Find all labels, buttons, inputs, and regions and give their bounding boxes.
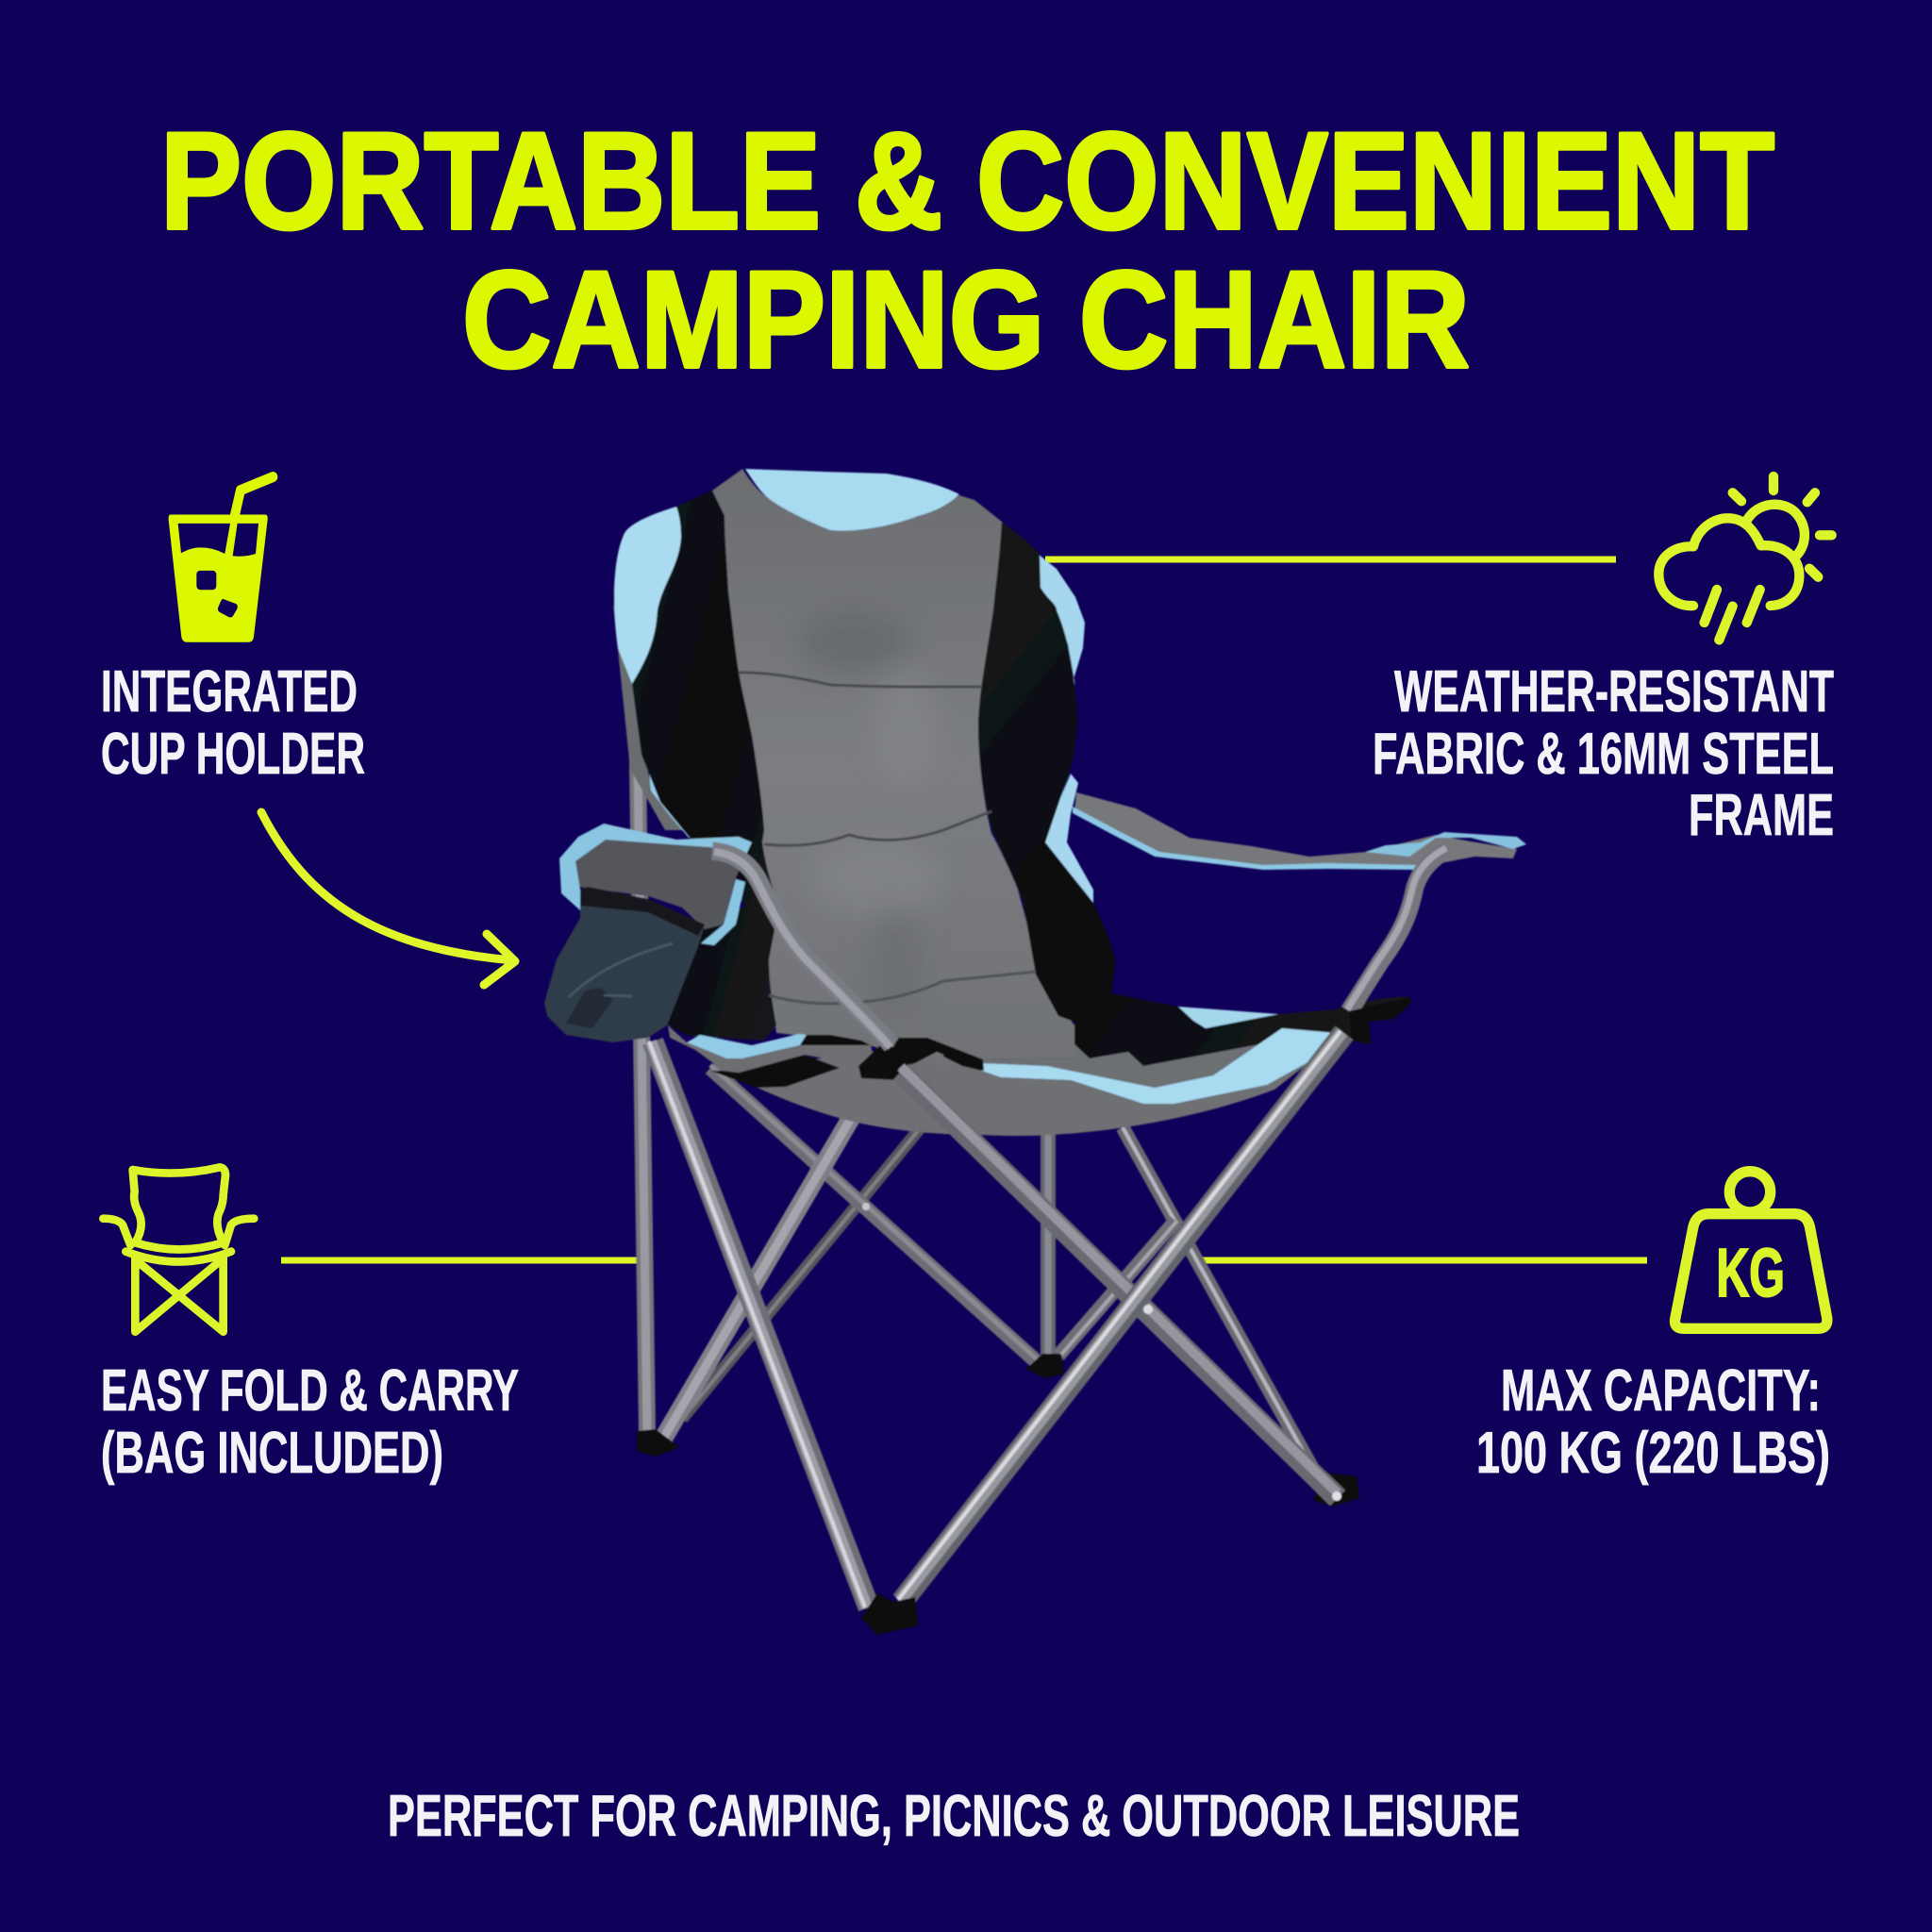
title [160, 104, 1774, 396]
seat black corner [943, 1047, 982, 1071]
text: integrated cup holder [101, 659, 365, 787]
seat grey inset [981, 1028, 1282, 1088]
rear legs and struts [637, 698, 1316, 1474]
front foot [861, 1593, 918, 1635]
right seat tab [1349, 997, 1411, 1044]
icon: kg weight [1675, 1172, 1827, 1328]
seat left blue piping [687, 1034, 807, 1058]
back black right panel and seat wing [978, 522, 1411, 1066]
icon: cup with straw [169, 477, 273, 642]
text: integrated cup holder: CUP HOLDER [101, 722, 365, 787]
chair photo illustration [544, 469, 1526, 1635]
seat underside bowl [726, 1047, 1313, 1136]
icon: folding chair [103, 1167, 254, 1332]
text: weather-resistant fabric: FRAME [1689, 783, 1834, 848]
icon: kg weight: KG [1716, 1236, 1785, 1311]
back quilting seams [739, 673, 1036, 1004]
text: max capacity [1476, 1358, 1830, 1486]
seat left mesh [710, 1055, 840, 1088]
feature: cup holder [101, 477, 365, 787]
back: left grey rim and blue panels [613, 507, 1093, 903]
back black left panel [632, 491, 776, 1041]
feature: weather resistant [1373, 476, 1834, 848]
seat small blue patch [1178, 1007, 1278, 1028]
back centre grey panel [712, 469, 1077, 1066]
rear feet [637, 1354, 1359, 1507]
title: CAMPING CHAIR [462, 242, 1470, 396]
text: integrated cup holder: INTEGRATED [101, 659, 358, 724]
feature: easy fold [101, 1167, 519, 1486]
back top blue panel [745, 469, 959, 531]
arrow to cup holder [261, 812, 515, 985]
cup holder arm pad [559, 824, 752, 945]
text: easy fold and carry: (BAG INCLUDED) [101, 1421, 443, 1486]
text: easy fold and carry [101, 1358, 519, 1486]
icon: cloud, sun and rain [1658, 476, 1832, 640]
seat left grey rim [668, 1025, 873, 1073]
left arm tube [712, 851, 891, 1047]
text: easy fold and carry: EASY FOLD & CARRY [101, 1358, 519, 1424]
connector line: max capacity [1201, 1257, 1647, 1264]
right arm tube [1347, 848, 1448, 1011]
centre clip [858, 1038, 984, 1080]
right armrest fabric [1073, 792, 1526, 870]
feature: max capacity [1476, 1172, 1830, 1486]
seat black edge chunk [800, 1035, 871, 1045]
title: PORTABLE & CONVENIENT [160, 104, 1774, 258]
back fabric shading [797, 608, 943, 1019]
connector line: easy fold [281, 1257, 638, 1264]
text: weather-resistant fabric [1373, 659, 1834, 848]
front legs [649, 1031, 1344, 1607]
connector line: weather-resistant [1045, 557, 1616, 562]
cup holder pouch [544, 887, 705, 1042]
seat large blue stripe [982, 1028, 1336, 1104]
